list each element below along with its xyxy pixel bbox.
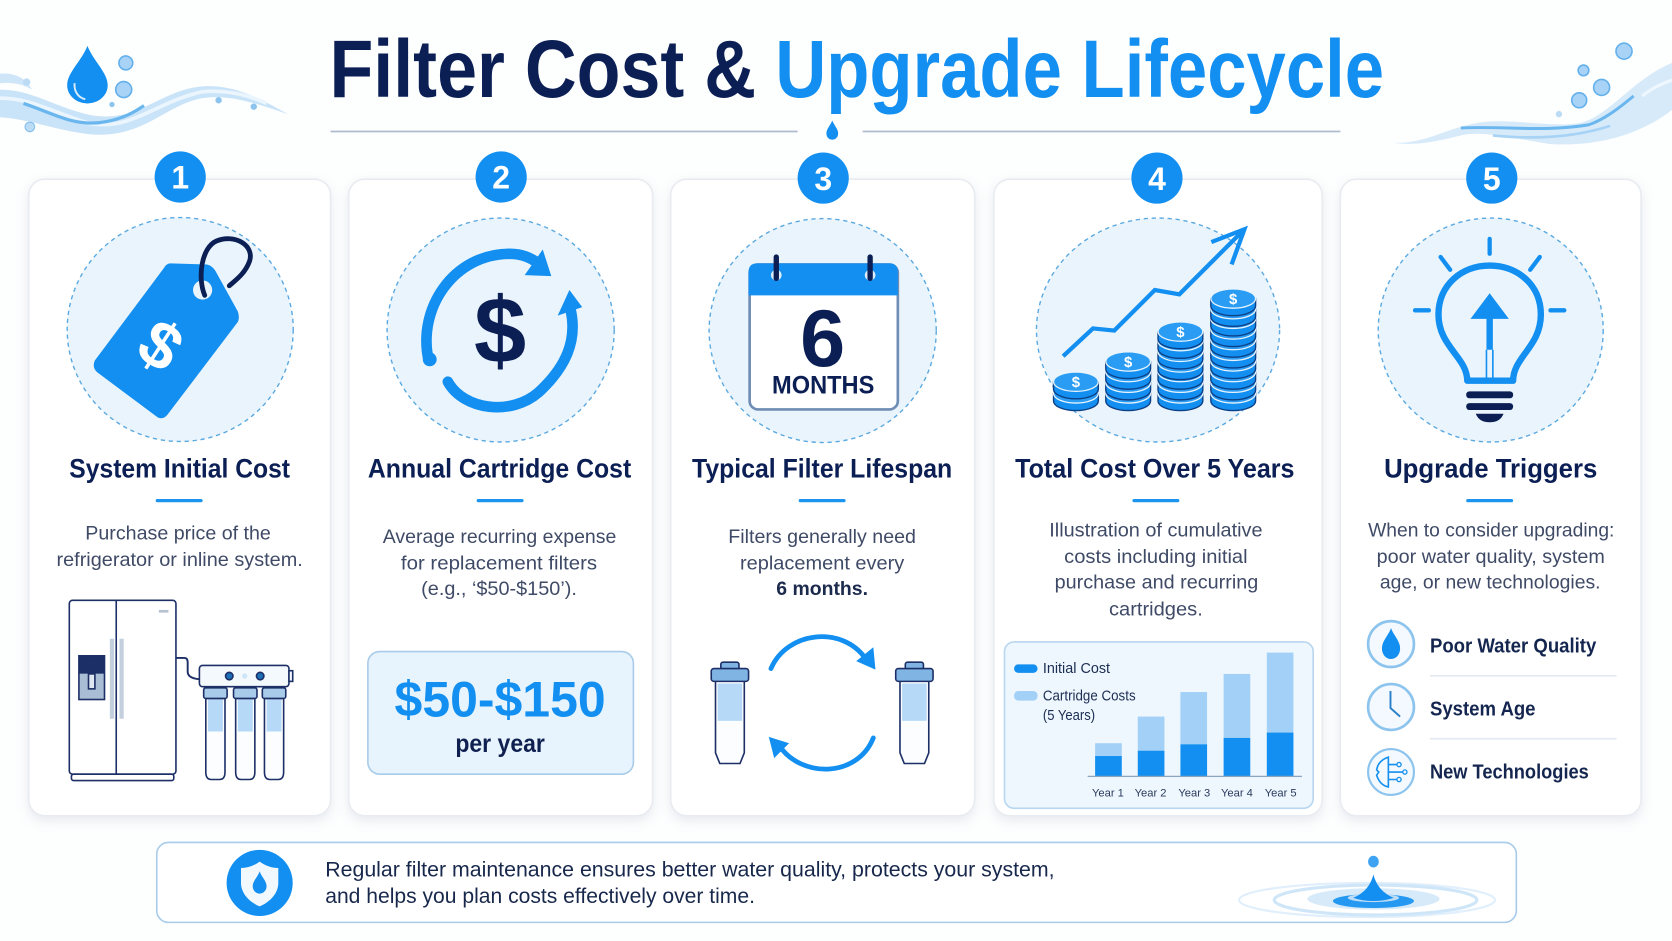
icon: price tag: [67, 218, 293, 441]
heading: Typical Filter Lifespan: [692, 454, 952, 484]
badge 5: 5: [1483, 161, 1501, 197]
description: Purchase price of the: [85, 523, 271, 545]
description: [1368, 519, 1614, 594]
filter cartridges: [204, 688, 286, 779]
x axis labels: Year 4: [1221, 788, 1253, 800]
icon: price tag: $: [125, 305, 196, 387]
footer text: [325, 859, 1055, 908]
icon: water drop: [67, 46, 108, 103]
badge 1: 1: [171, 160, 189, 196]
bar chart: cumulative cost: [1004, 642, 1313, 808]
panel: system initial cost: [29, 151, 331, 816]
trigger: system age: [1368, 684, 1536, 730]
filter left: [711, 662, 749, 763]
title divider with drop: [331, 120, 1340, 140]
badge 4: [1131, 152, 1183, 204]
coin stack 1: $: [1072, 374, 1081, 391]
description: [728, 526, 916, 600]
x axis labels: Year 2: [1135, 788, 1167, 800]
legend: Cartridge Costs: [1043, 689, 1136, 705]
description: [1049, 519, 1263, 620]
description: (e.g., ‘$50-$150’).: [421, 578, 577, 600]
description: age, or new technologies.: [1380, 572, 1601, 594]
callout: price range: $50-$150: [395, 672, 606, 728]
icon: light bulb with up arrow: [1378, 218, 1603, 442]
panel: typical filter lifespan: [671, 152, 975, 816]
icon: calendar 6 months: 6: [800, 294, 845, 384]
icon: recurring dollar: $: [474, 278, 526, 383]
x axis labels: Year 3: [1178, 788, 1210, 800]
badge 2: [476, 151, 527, 203]
description: cartridges.: [1109, 598, 1203, 620]
description: Filters generally need: [728, 526, 916, 548]
badge 3: 3: [814, 161, 832, 197]
trigger: poor water quality: [1368, 621, 1597, 667]
title: [329, 24, 1384, 115]
coin stack 1: [1054, 372, 1098, 411]
bars: [1095, 653, 1293, 776]
water splash top left: [0, 46, 288, 135]
description: Average recurring expense: [383, 526, 616, 548]
badge 5: [1466, 152, 1517, 204]
description: replacement every: [740, 552, 904, 574]
icon: shield with drop: [227, 850, 293, 916]
badge 2: 2: [492, 160, 510, 196]
description: 6 months.: [776, 578, 868, 600]
description: [383, 526, 616, 600]
callout: price range: per year: [455, 731, 545, 758]
trigger: system age: System Age: [1430, 699, 1536, 721]
coin stack 4: [1211, 289, 1256, 411]
description: Illustration of cumulative: [1049, 519, 1263, 541]
badge 4: 4: [1148, 161, 1166, 197]
icon: calendar 6 months: MONTHS: [772, 372, 874, 399]
callout: price range: [368, 652, 633, 774]
description: refrigerator or inline system.: [57, 549, 303, 571]
panel: upgrade triggers: [1340, 152, 1641, 816]
icon: water ripple: [1239, 856, 1495, 917]
legend: [1014, 661, 1136, 724]
x axis labels: Year 5: [1265, 788, 1297, 800]
legend: Initial Cost: [1043, 661, 1110, 677]
panel: annual cartridge cost: [349, 151, 653, 816]
coin stack 3: $: [1176, 324, 1185, 341]
x axis labels: [1092, 788, 1297, 800]
footer text: Regular filter maintenance ensures better water quality, protects your system,: [325, 859, 1055, 882]
icon: recurring dollar: [387, 218, 614, 442]
coin stack 4: $: [1229, 291, 1238, 308]
trigger: new technologies: New Technologies: [1430, 761, 1589, 783]
heading: Upgrade Triggers: [1384, 454, 1597, 484]
heading: System Initial Cost: [69, 454, 290, 484]
description: poor water quality, system: [1377, 546, 1605, 568]
illustration: refrigerator and inline filter system: [69, 600, 293, 781]
description: When to consider upgrading:: [1368, 519, 1614, 541]
icon: filter replacement cycle: [711, 637, 933, 769]
coin stack 3: [1158, 322, 1203, 411]
coin stack 2: $: [1124, 354, 1133, 371]
title: Filter Cost &: [329, 24, 756, 115]
description: costs including initial: [1064, 546, 1248, 568]
description: [57, 523, 303, 571]
footer banner: [157, 842, 1516, 922]
legend: (5 Years): [1043, 708, 1095, 724]
heading: Annual Cartridge Cost: [368, 454, 631, 484]
water splash top right: [1394, 43, 1672, 144]
panel: total cost over 5 years: [994, 152, 1322, 816]
badge 3: [798, 152, 849, 204]
description: purchase and recurring: [1055, 572, 1258, 594]
filter right: [896, 662, 933, 763]
coin stack 2: [1106, 352, 1151, 411]
icon: calendar 6 months: [709, 219, 936, 443]
footer text: and helps you plan costs effectively over time.: [325, 885, 755, 908]
title: Upgrade Lifecycle: [775, 24, 1384, 115]
icon: rising coin stacks: [1036, 218, 1280, 442]
description: for replacement filters: [401, 552, 597, 574]
trigger: new technologies: [1368, 749, 1589, 795]
heading: Total Cost Over 5 Years: [1015, 454, 1295, 484]
badge 1: [155, 151, 206, 203]
x axis labels: Year 1: [1092, 788, 1124, 800]
trigger: poor water quality: Poor Water Quality: [1430, 636, 1597, 658]
